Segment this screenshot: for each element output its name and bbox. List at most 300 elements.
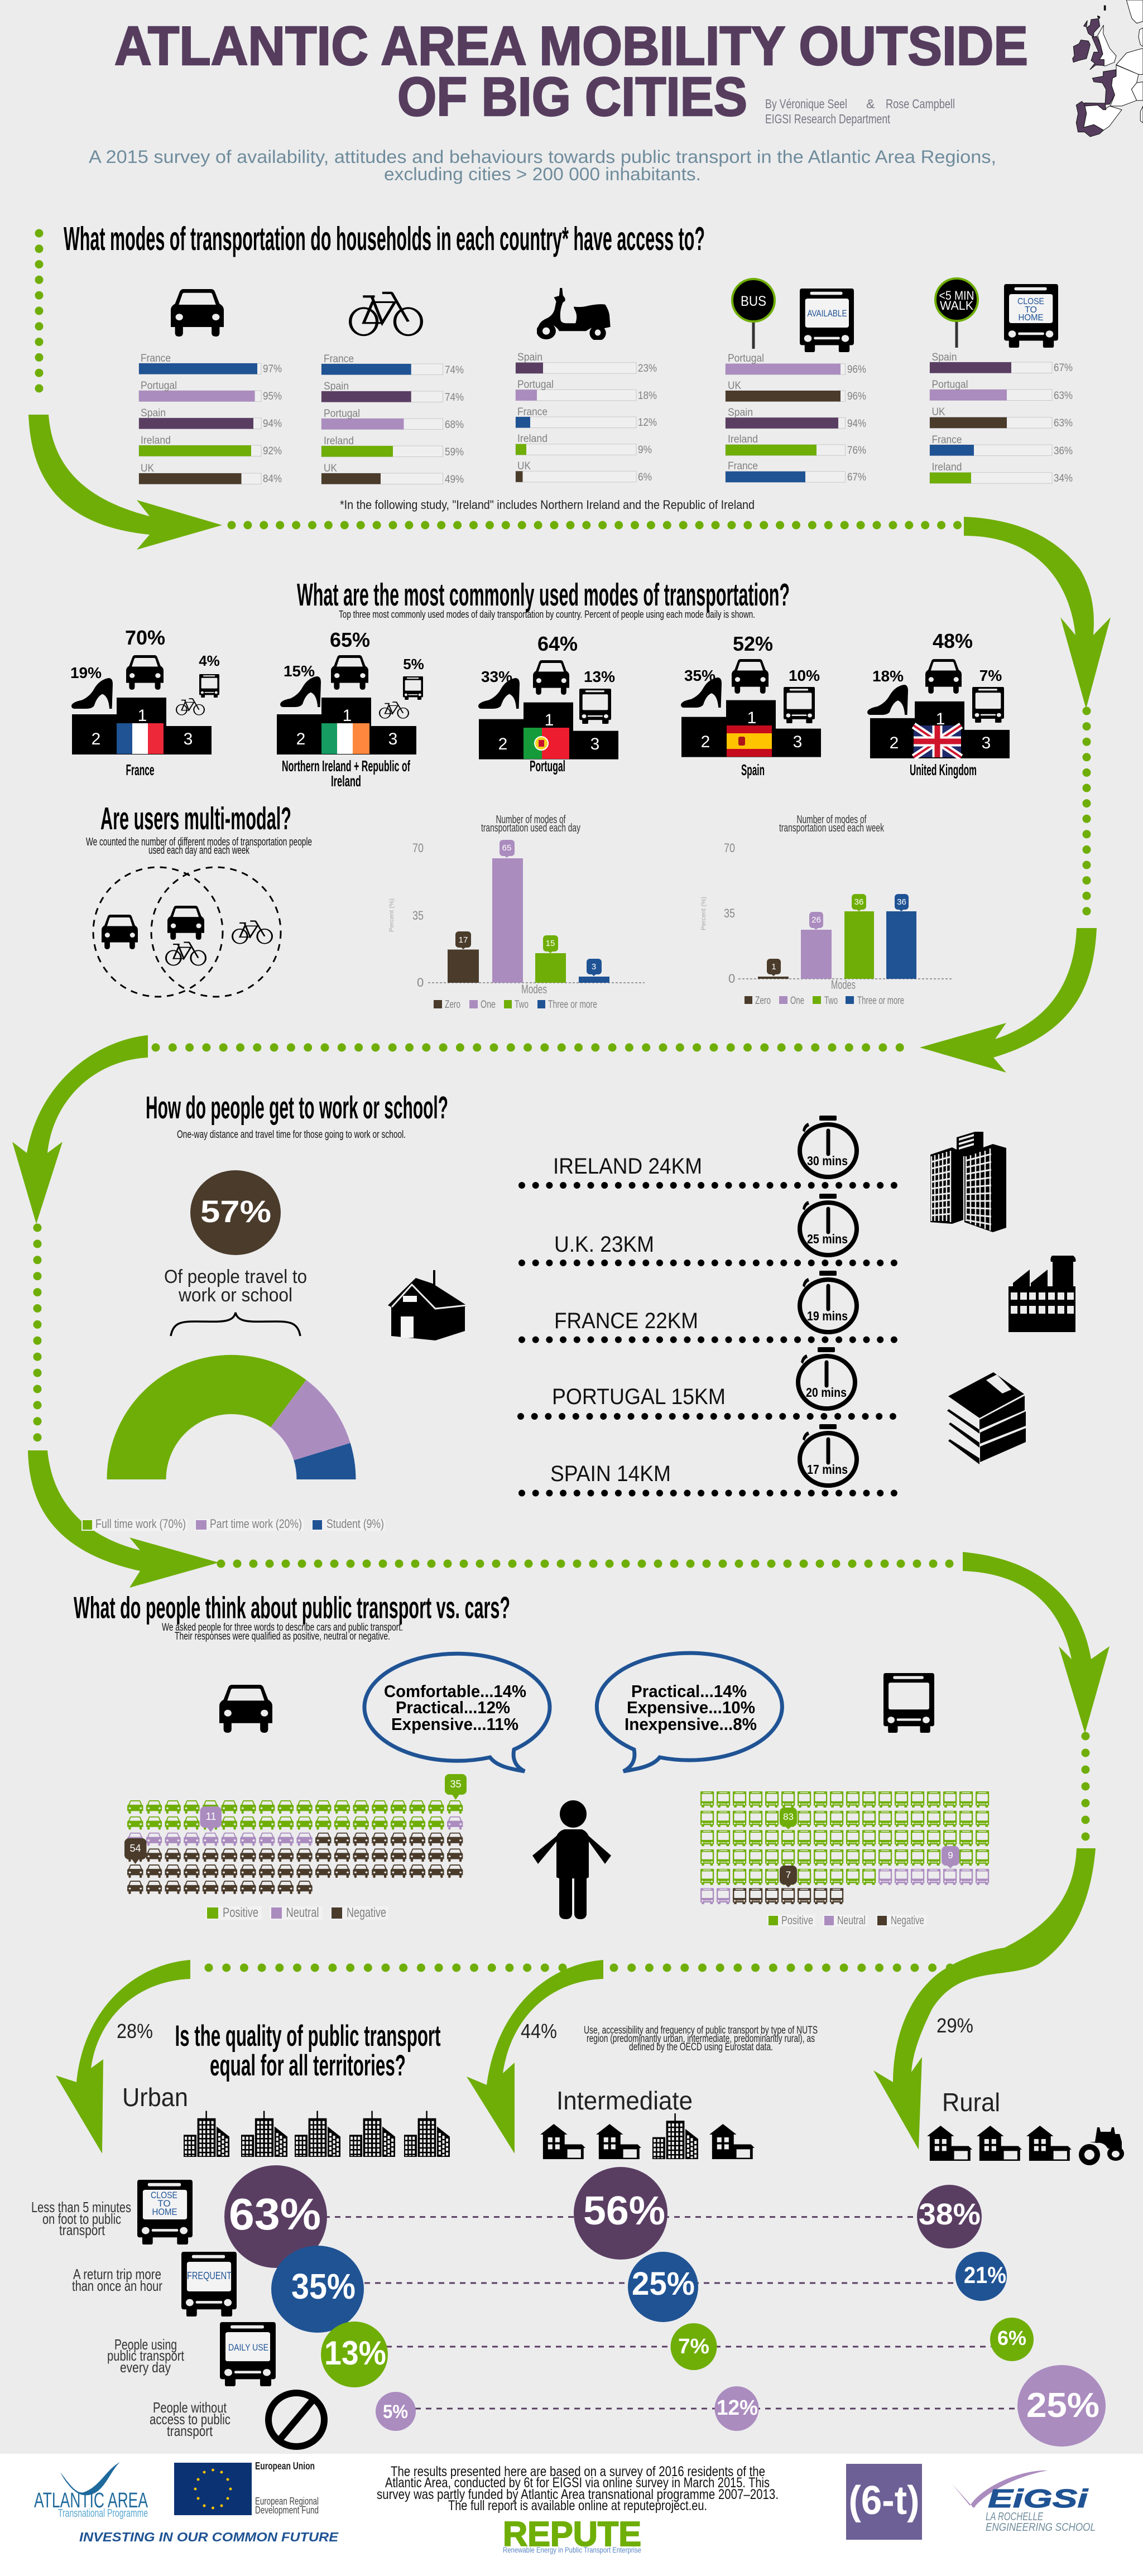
row: frequent service: A return trip more [73,2266,161,2282]
bar chart: car access: 84% [263,473,282,485]
panel: Portugal podium: 33% [481,668,512,685]
arrow path: flow connector 1 [28,233,961,550]
icon: factory [1008,1256,1076,1332]
speech bubble: public transport words [597,1653,782,1771]
row: Spain distance [522,1424,894,1493]
panel: UK podium: 2 [890,734,899,752]
authors [765,97,955,126]
title: ATLANTIC AREA MOBILITY OUTSIDE [114,15,1028,76]
text: methodology note: The results presented here are based on a survey of 2016 residents of the [391,2464,765,2479]
panel: France podium: 70% [125,626,165,649]
text: perception description: We asked people for three words to describe cars and public transport. [162,1622,403,1633]
logo: EIGSI: ENGINEERING SCHOOL [986,2521,1096,2534]
text: perception description [162,1622,403,1642]
row: close to home: CLOSE [151,2190,177,2200]
heading: getting to work or school: How do people get to work or school? [146,1090,448,1126]
bar chart: bus stop within 5 minutes: 67% [1054,362,1073,374]
row: frequent service: than once an hour [72,2277,162,2294]
icon: bus stop sign: BUS [741,294,766,309]
panel: France podium: 2 [92,730,100,748]
column: Rural [927,2088,1124,2165]
icon: walk sign: <5 MIN [939,289,974,302]
bar chart: modes used each week: 36 [897,897,906,907]
legend: occupation: Part time work (20%) [210,1517,302,1531]
bar chart: bus stop within 5 minutes: Spain [932,352,957,363]
speech bubble: car words: Practical...12% [396,1698,510,1717]
text: NUTS description: region (predominantly urban, intermediate, predominantly rural), as [587,2033,815,2045]
icon: scooter [536,288,611,341]
panel: Ireland podium: 65% [330,628,370,651]
logo: Atlantic Area: ATLANTIC AREA [34,2489,148,2512]
row: France distance [522,1271,894,1340]
bar chart: bus stop within 5 minutes: Ireland [932,462,962,473]
bar chart: modes used each week: transportation used each week [779,822,885,834]
bar chart: modes used each day: Modes [521,982,547,996]
bar chart: car access: 95% [263,391,282,402]
bar chart: scooter access: Ireland [517,433,548,445]
logo: European Union [174,2460,319,2516]
bar chart: car access: 94% [263,418,282,430]
row: UK distance [522,1194,894,1263]
logo: REPUTE: REPUTE [503,2515,641,2554]
bar chart: modes used each day: 3 [592,962,596,972]
bar chart: modes used each week: Percent (%) [700,897,707,930]
bar chart: modes used each day: Percent (%) [388,898,395,932]
row: daily use: People using [114,2336,177,2353]
panel: Ireland podium: Ireland [331,772,361,790]
row: frequent service [72,2246,1007,2333]
arrow path: flow connector 2 [156,517,1111,1073]
bar chart: modes used each week: 0 [728,972,735,986]
text: commute description: One-way distance and travel time for those going to work or school. [177,1129,406,1141]
title [114,15,1028,127]
bar chart: bus stop within 5 minutes: 63% [1054,417,1073,429]
text: NUTS description: defined by the OECD using Eurostat data. [629,2041,773,2053]
legend: car perception: Positive [223,1905,258,1920]
row: Ireland distance: IRELAND 24KM [553,1154,702,1179]
bar chart: scooter access: France [517,406,548,418]
arrow path: flow connector 4 [873,1552,1110,2150]
text: methodology note: The full report is available online at reputeproject.eu. [448,2498,707,2513]
row: frequent service: FREQUENT [187,2270,232,2281]
speech bubble: public transport words: Practical...14% [631,1681,747,1701]
row: daily use: public transport [107,2347,185,2364]
bar chart: modes used each day: transportation used each day [481,822,580,834]
subtitle: excluding cities > 200 000 inhabitants. [384,164,701,184]
panel: Spain podium: 2 [701,733,710,751]
row: Ireland distance [522,1116,894,1185]
bar chart: bicycle access: 68% [445,419,464,431]
logo: EIGSI [952,2471,1096,2534]
bar chart: bus stop within 5 minutes: 34% [1054,473,1073,484]
bar chart: bicycle access: 49% [445,474,464,486]
panel: footer [0,2454,1143,2576]
bar chart: bicycle access: Spain [324,381,349,392]
panel: Portugal podium: Portugal [530,757,565,775]
icon: books [947,1372,1026,1464]
icon: bicycle [350,292,421,335]
row: Portugal distance: PORTUGAL 15KM [552,1385,726,1409]
panel: Ireland podium: 3 [388,730,397,748]
stat: 57% [190,1170,281,1255]
text: of people travel [164,1266,307,1306]
panel: Portugal podium: 1 [545,711,554,729]
bar chart: modes used each week: Modes [831,978,856,992]
icon: walk sign: WALK [940,299,973,313]
icon: bus close to home: TO [1025,305,1037,315]
logo: European Union: European Regional [255,2496,319,2507]
logo: 6-t: (6-t) [848,2478,920,2523]
bar chart: bus availability: 76% [847,445,866,456]
panel: Ireland podium: Northern Ireland + Republic of [282,757,410,775]
pictogram: car perception grid: 54 [129,1843,141,1854]
panel: France podium: 19% [70,664,102,681]
bar chart: modes used each day: 17 [459,935,468,945]
row: daily use [107,2318,1034,2387]
panel: France podium: 3 [184,730,193,748]
speech bubble: public transport words: Expensive...10% [627,1698,755,1717]
logo: REPUTE: Renewable Energy in Public Transport Enterprise [503,2545,641,2554]
bar chart: scooter access: 18% [638,390,657,402]
bar chart: modes used each week: 35 [724,906,735,920]
row lines: dashed connectors [324,2217,1019,2409]
icon: walk sign [935,278,978,348]
text: perception description: Their responses were qualified as positive, neutral or negative. [175,1631,390,1642]
bar chart: bus stop within 5 minutes [930,352,1073,484]
text: of people travel: Of people travel to [164,1266,307,1287]
bar chart: car access [139,353,282,485]
bar chart: bus availability: Ireland [728,434,758,445]
bar chart: scooter access: 9% [638,444,652,456]
bar chart: bus availability: Spain [728,407,753,419]
bar chart: bicycle access: 59% [445,446,464,458]
bar chart: modes used each week: 26 [811,915,821,925]
bar chart: modes used each day: Three or more [548,999,597,1011]
row: no access: People without [153,2399,227,2416]
row: close to home: TO [157,2198,171,2209]
bar chart: bicycle access: 74% [445,392,464,403]
semi-donut chart: occupation [107,1355,356,1479]
row: close to home: 38% [919,2198,981,2231]
row: no access: access to public [150,2411,230,2428]
legend: occupation: Student (9%) [326,1517,384,1531]
row: Portugal distance: 20 mins [806,1385,847,1400]
row: Ireland distance: 30 mins [807,1154,848,1168]
subtitle [89,147,996,184]
heading: quality across territories: Is the quality of public transport [175,2020,441,2053]
row: close to home: Less than 5 minutes [31,2199,131,2215]
bar chart: scooter access [516,352,657,483]
bar chart: bus availability: 96% [847,364,866,376]
panel: UK podium [867,629,1010,778]
icon: person [532,1800,611,1919]
bar chart: bicycle access: UK [324,463,337,474]
row: daily use: 6% [997,2327,1026,2349]
legend: bus perception: Positive [781,1914,813,1927]
bar chart: bus availability: 94% [847,418,866,430]
brace [171,1313,300,1336]
bar chart: car access: France [141,353,171,364]
bar chart: modes used each day: One [481,999,496,1011]
row: Spain distance: SPAIN 14KM [550,1462,671,1486]
row: UK distance: U.K. 23KM [554,1232,654,1257]
legend: bus perception: Neutral [837,1914,866,1927]
text: methodology note: survey was partly funded by Atlantic Area transnational programme 2007–2013. [377,2487,779,2502]
arrow path: flow connector 3 [12,1035,954,1588]
share labels: 29% [937,2014,973,2037]
stat: 57%: 57% [200,1194,271,1229]
column: Rural: Rural [942,2088,1000,2117]
bar chart: scooter access: Spain [517,352,542,363]
bar chart: modes used each week: One [790,995,804,1007]
panel: Portugal podium [478,632,618,775]
legend: car perception [206,1905,388,1920]
bar chart: bus availability [726,353,866,483]
logo: European Union: Development Fund [255,2505,319,2516]
bar chart: bus stop within 5 minutes: 36% [1054,445,1073,457]
arrow path: dotted link to territories [56,1960,953,2154]
bar chart: modes used each week: Zero [755,995,771,1007]
bar chart: modes used each day: 0 [417,975,424,989]
row: close to home: 56% [583,2189,665,2233]
panel: Ireland podium: 2 [296,730,305,748]
panel: Spain podium: 52% [733,632,773,655]
row: no access: 25% [1026,2386,1099,2425]
text: podium description: Top three most commonly used modes of daily transportation by country. Percent of people using each mode daily is shown. [339,609,755,620]
row: close to home: on foot to public [42,2210,121,2227]
bar chart: modes used each day: Number of modes of [496,814,566,826]
row: daily use: every day [120,2359,171,2376]
bar chart: modes used each week: Three or more [857,995,904,1007]
row: close to home: HOME [152,2207,177,2217]
bar chart: bus stop within 5 minutes: UK [932,406,945,418]
bar chart: modes used each week: Number of modes of [797,814,867,826]
share labels: 44% [521,2020,557,2042]
panel: UK podium: 3 [982,734,991,752]
bar chart: modes used each day: 70 [412,841,424,855]
text: methodology note: Atlantic Area, conducted by 6t for EIGSI via online survey in March 2015. This [385,2475,770,2491]
authors: Rose Campbell [886,97,955,111]
icon: car [171,289,224,337]
bar chart: bus availability: France [728,460,758,472]
bar chart: scooter access: 23% [638,363,657,374]
bar chart: modes used each week: 1 [771,962,776,972]
row: frequent service: 25% [632,2266,695,2302]
bar chart: bus stop within 5 minutes: France [932,434,962,446]
panel: Portugal podium: 3 [590,735,599,753]
bar chart: modes used each week: 70 [724,841,735,855]
row: no access [150,2365,1106,2447]
panel: Spain podium: Spain [741,761,765,778]
title: OF BIG CITIES [397,66,747,127]
column: Intermediate [540,2086,755,2159]
icon: map of Atlantic regions [1073,0,1143,137]
panel: Ireland podium: 15% [284,662,315,680]
row: no access: 5% [383,2401,408,2423]
heading: quality across territories [175,2020,441,2082]
authors: & [866,97,875,111]
icon: bus available [800,289,854,352]
legend: car perception: Negative [347,1905,386,1920]
text: multi-modal description: We counted the number of different modes of transportation people [86,836,312,848]
panel: Ireland podium [277,628,424,790]
panel: France podium: France [126,761,154,778]
row: frequent service: 21% [964,2262,1006,2288]
share labels: 28% [117,2020,153,2042]
bar chart: car access: UK [141,463,154,474]
row: France distance: FRANCE 22KM [554,1309,698,1333]
row: France distance: 19 mins [807,1309,848,1323]
authors: EIGSI Research Department [765,112,890,126]
bar chart: bus stop within 5 minutes: Portugal [932,379,968,391]
subtitle: A 2015 survey of availability, attitudes and behaviours towards public transport in the Atlantic Area Regions, [89,147,996,167]
row: no access: transport [167,2423,213,2439]
bar chart: scooter access: 12% [638,417,657,429]
column: Urban: Urban [122,2083,188,2112]
legend: occupation: Full time work (70%) [95,1517,186,1531]
text: of people travel: work or school [178,1285,292,1306]
bar chart: bus availability: 96% [847,391,866,402]
row: daily use: 7% [678,2335,709,2358]
icon: bus close to home [1004,284,1058,348]
panel: UK podium: United Kingdom [910,761,977,778]
panel: Portugal podium: 2 [498,735,507,753]
logo: Atlantic Area [34,2462,148,2520]
panel: UK podium: 48% [933,629,973,652]
bar chart: bicycle access: Portugal [324,408,360,420]
panel: France podium: 4% [199,652,220,669]
bar chart: car access: Portugal [141,380,177,392]
icon: bus close to home: CLOSE [1017,297,1044,306]
text: NUTS description: Use, accessibility and frequency of public transport by type of NUTS [584,2025,818,2036]
column: Intermediate: Intermediate [556,2086,693,2115]
bar chart: scooter access: Portugal [517,379,554,391]
row: close to home: 63% [229,2189,321,2239]
panel: UK podium: 18% [872,667,904,685]
footnote: *In the following study, "Ireland" includes Northern Ireland and the Republic of Ireland [340,498,755,512]
logo: Atlantic Area: Transnational Programme [58,2507,148,2520]
panel: Ireland podium: 5% [403,656,424,672]
panel: Portugal podium: 13% [584,668,615,685]
row: daily use: DAILY USE [228,2342,268,2353]
speech bubble: car words [364,1654,550,1771]
row: close to home [31,2165,982,2268]
bar chart: modes used each day: 15 [546,939,555,948]
icon: office buildings [930,1132,1006,1232]
bar chart: bicycle access: 74% [445,364,464,376]
bar chart: bicycle access: Ireland [324,435,354,447]
bar chart: modes used each day: 65 [502,843,511,853]
panel: Portugal podium: 64% [537,632,578,655]
panel: Spain podium: 3 [793,733,802,751]
logo: EIGSI: EiGSi [988,2484,1089,2513]
authors: By Véronique Seel [765,97,847,111]
legend: car perception: Neutral [286,1905,319,1920]
panel: Spain podium: 1 [747,709,756,727]
share labels [117,2014,973,2042]
bar chart: bicycle access [321,353,464,486]
pictogram: bus perception grid [700,1791,989,1904]
legend: bus perception [767,1914,926,1927]
pictogram: car perception grid [124,1774,467,1894]
bar chart: scooter access: 6% [638,472,652,483]
pictogram: car perception grid: 11 [206,1811,216,1822]
bar chart: bicycle access: France [324,353,354,365]
panel: Spain podium [681,632,821,778]
text: NUTS description [584,2025,818,2053]
icon: car [219,1685,272,1733]
speech bubble: car words: Expensive...11% [391,1714,518,1734]
speech bubble: public transport words: Inexpensive...8% [625,1714,757,1734]
heading: multi-modal: Are users multi-modal? [100,801,291,837]
pictogram: bus perception grid: 7 [786,1869,791,1880]
bar chart: bus availability: 67% [847,472,866,483]
icon: bus available: AVAILABLE [807,308,847,319]
row: Spain distance: 17 mins [807,1462,848,1477]
bar chart: modes used each day: Zero [445,999,460,1011]
bar chart: scooter access: UK [517,460,531,472]
panel: Spain podium: 35% [684,667,715,684]
column: Urban [122,2083,450,2157]
bar chart: car access: 97% [263,363,282,375]
legend: occupation [81,1517,386,1531]
tagline: INVESTING IN OUR COMMON FUTURE [79,2530,339,2544]
logo: European Union: European Union [255,2460,315,2472]
bar chart: bus availability: Portugal [728,353,764,364]
bar chart: car access: Spain [141,407,166,419]
bar chart: car access: 92% [263,445,282,457]
heading: public transport vs cars: What do people think about public transport vs. cars? [74,1590,510,1625]
bar chart: modes used each day: Two [515,999,529,1011]
logo: EIGSI: LA ROCHELLE [986,2511,1043,2523]
text: methodology note [377,2464,779,2513]
row: Portugal distance [521,1347,894,1416]
bar chart: modes used each week: Two [824,995,838,1007]
panel: France podium: 1 [138,707,147,725]
row: close to home: transport [59,2222,105,2238]
bar chart: modes used each week [700,814,952,1007]
diagram: venn of modes [93,867,281,997]
speech bubble: car words: Comfortable...14% [384,1681,526,1701]
heading: quality across territories: equal for all territories? [210,2049,406,2082]
panel: Ireland podium: 1 [343,707,352,725]
icon: bus stop sign [732,279,775,349]
text: multi-modal description [86,836,312,857]
pictogram: car perception grid: 35 [450,1779,462,1790]
row: no access: 12% [717,2396,758,2420]
panel: UK podium: 1 [936,710,945,728]
pictogram: bus perception grid: 9 [948,1850,953,1861]
bar chart: modes used each day [388,814,645,1011]
row: daily use: 13% [324,2334,386,2372]
icon: bus [883,1673,934,1733]
panel: UK podium: 7% [979,667,1002,684]
bar chart: bus availability: UK [728,380,741,392]
icon: house [388,1270,467,1340]
bar chart: car access: Ireland [141,435,171,446]
panel: Spain podium: 10% [789,667,820,684]
logo: 6-t [846,2464,922,2540]
row: frequent service: 35% [291,2266,356,2306]
panel: France podium [70,626,220,778]
bar chart: bus stop within 5 minutes: 63% [1054,390,1073,402]
pictogram: bus perception grid: 83 [783,1811,794,1822]
text: multi-modal description: used each day and each week [148,844,250,857]
icon: bus close to home: HOME [1018,313,1044,323]
bar chart: modes used each week: 36 [854,897,863,907]
row: UK distance: 25 mins [807,1232,848,1246]
legend: bus perception: Negative [891,1914,924,1927]
